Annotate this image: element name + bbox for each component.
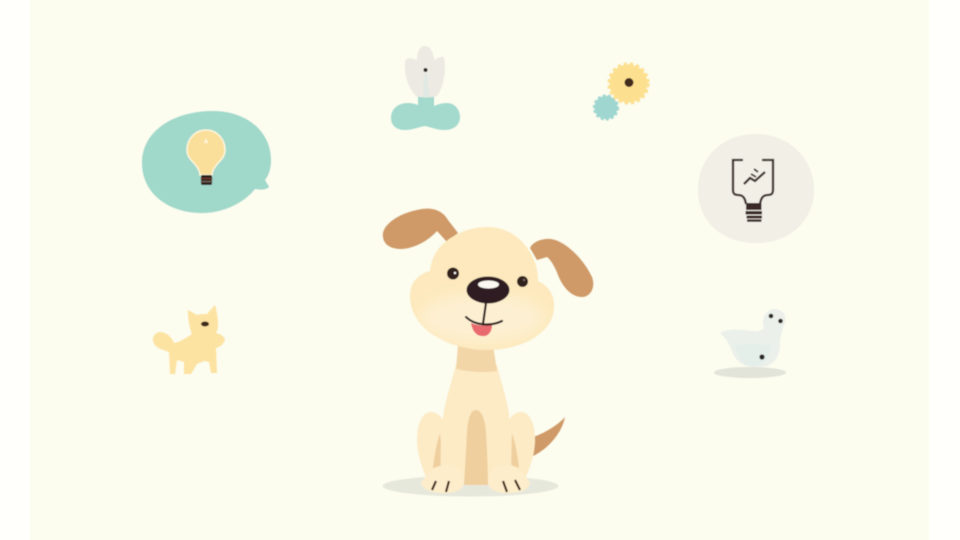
ground shadow xyxy=(714,367,786,378)
head xyxy=(410,227,554,350)
right paw xyxy=(488,465,530,493)
nose xyxy=(466,276,510,304)
right eye xyxy=(517,276,528,287)
icon: grey circle with bulb chart xyxy=(698,134,814,243)
tongue xyxy=(471,323,492,336)
neck collar band xyxy=(456,345,497,372)
icon: light bulb xyxy=(187,130,225,185)
ground shadow xyxy=(382,476,558,496)
icon: white tulip on teal base xyxy=(391,46,460,130)
mouth xyxy=(466,303,502,324)
side leg shading xyxy=(433,433,443,468)
cheek highlight xyxy=(420,294,544,342)
torso xyxy=(441,365,512,480)
left ear xyxy=(383,209,458,249)
yellow gear xyxy=(609,64,648,103)
haunches xyxy=(417,412,450,490)
icon: small yellow cat xyxy=(153,305,225,374)
icon: pale duck with shadow xyxy=(714,309,786,378)
teal gear xyxy=(594,96,618,119)
left eye xyxy=(447,268,459,280)
speech bubble with light bulb xyxy=(142,111,271,213)
right ear xyxy=(530,239,593,297)
chest shading xyxy=(464,410,488,485)
icon: yellow and teal gears xyxy=(594,64,648,119)
left paw xyxy=(421,465,464,493)
bubble shape xyxy=(142,111,271,213)
main character: sitting puppy xyxy=(382,209,593,497)
tail xyxy=(533,417,565,456)
